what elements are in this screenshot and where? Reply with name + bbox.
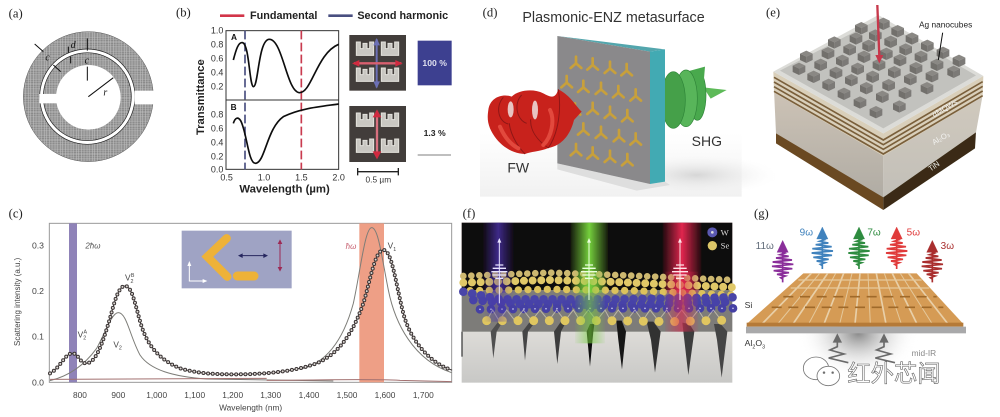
dark background — [462, 223, 732, 293]
x axis ticks: 800 — [73, 390, 87, 400]
panel a: ring resonator diagram — [9, 6, 155, 162]
substrate floor — [462, 330, 732, 383]
x axis title: Wavelength (µm) — [239, 184, 330, 196]
harmonic 5 omega — [886, 227, 920, 269]
x axis ticks: 1,000 — [146, 390, 167, 400]
gold nanoantennas — [561, 57, 641, 165]
plate contact shadow — [557, 163, 670, 191]
watermark text: 红外芯闻 — [847, 360, 941, 386]
Al2O3 layer — [774, 90, 983, 197]
Se top atoms — [463, 273, 733, 295]
emitted beams — [482, 223, 701, 293]
purple wave packet — [491, 238, 507, 303]
band labels — [84, 241, 356, 251]
y axis ticks: 0.8 — [211, 109, 223, 119]
chart frame — [49, 223, 452, 382]
legend: Second harmonic — [357, 10, 448, 22]
Se bottom atoms — [487, 320, 733, 322]
legend: Fundamental — [250, 10, 317, 22]
peak labels: V — [78, 329, 83, 339]
x axis ticks: 1.0 — [258, 173, 270, 183]
harmonic 3 omega — [922, 240, 954, 282]
y axis ticks: 0.4 — [211, 137, 223, 147]
watermark icon — [803, 357, 840, 386]
Ag nanocubes callout — [919, 19, 972, 60]
2 omega band — [69, 223, 77, 382]
plot divider — [226, 98, 339, 101]
100 percent box: 100 % — [422, 58, 447, 68]
x axis ticks: 900 — [111, 390, 126, 400]
y axis ticks: 0.3 — [32, 241, 44, 251]
white gap ring — [40, 49, 135, 144]
Ag nanocubes callout: Ag nanocubes — [919, 19, 972, 29]
y axis ticks — [211, 25, 223, 175]
green SHG helix — [661, 67, 727, 128]
AFM tips — [462, 321, 727, 378]
y axis ticks: 1.0 — [211, 25, 223, 35]
second harmonic marker — [242, 31, 247, 169]
scale bar — [358, 168, 398, 185]
plot frame — [226, 31, 339, 169]
metasurface plate — [557, 36, 665, 184]
y axis ticks: 0.2 — [211, 81, 223, 91]
x axis ticks: 1,700 — [413, 390, 434, 400]
x axis ticks — [73, 390, 434, 400]
y axis ticks: 0.6 — [211, 123, 223, 133]
band labels: 2ħω — [84, 241, 100, 250]
Al2O3 label: 3 — [762, 344, 765, 350]
inner ring slit — [39, 94, 59, 103]
panel f label: (f) — [463, 206, 475, 220]
x axis ticks: 1,500 — [337, 390, 358, 400]
Al2O3 label: O — [755, 338, 762, 348]
top surface — [773, 15, 983, 133]
peak labels: A — [84, 330, 88, 336]
1.3 percent value: 1.3 % — [424, 128, 446, 138]
measured curve dots — [50, 250, 452, 374]
atom legend — [707, 227, 730, 251]
panel g: high harmonic generation — [745, 206, 966, 386]
band labels: ħω — [346, 242, 356, 251]
panel f: WSe2 on tips — [462, 206, 733, 383]
harmonic 3 omega: 3ω — [941, 241, 954, 252]
y axis ticks: 0.2 — [32, 286, 44, 296]
peak labels — [78, 241, 396, 352]
dimension letters: r — [103, 87, 107, 98]
harmonic 9 omega — [800, 227, 833, 269]
peak labels: 2 — [83, 336, 86, 342]
SEM image bottom — [349, 106, 406, 162]
Si label: Si — [745, 300, 752, 310]
y axis ticks: 0.8 — [211, 39, 223, 49]
floor shadow — [617, 155, 777, 195]
curve tags: A — [231, 32, 237, 42]
x axis title: Wavelength (nm) — [219, 403, 282, 413]
Al2O3 label: 2 — [752, 344, 755, 350]
y axis ticks: 0.2 — [211, 151, 223, 161]
peak labels: 2 — [119, 346, 122, 352]
mid-IR label: mid-IR — [912, 348, 936, 358]
green wave packet — [581, 238, 597, 300]
y axis ticks: 0.0 — [32, 377, 44, 387]
x axis ticks: 2.0 — [332, 173, 345, 183]
substrate edge — [462, 290, 732, 332]
y axis ticks: 0.1 — [32, 332, 44, 342]
dimension letters: c — [85, 55, 90, 66]
panel d label: (d) — [483, 6, 497, 20]
x axis ticks: 1,200 — [222, 390, 243, 400]
layer labels: Al₂O₃ — [930, 130, 951, 147]
peak labels: V — [125, 273, 131, 283]
outer ring slit — [135, 91, 155, 104]
x axis ticks: 0.5 — [220, 173, 233, 183]
y axis ticks — [32, 241, 44, 387]
y axis ticks: 0.0 — [211, 165, 223, 175]
pump arrows — [829, 333, 895, 363]
peak labels: 1 — [393, 247, 396, 253]
SHG label: SHG — [692, 133, 722, 149]
x axis ticks — [220, 173, 345, 183]
x axis ticks: 1,600 — [375, 390, 396, 400]
y axis ticks: 0.4 — [211, 67, 223, 77]
y axis ticks: 0.6 — [211, 53, 223, 63]
peak labels: 2 — [131, 279, 134, 285]
layer labels: αMQWs — [930, 97, 959, 119]
peak labels: B — [131, 273, 135, 279]
panel c label: (c) — [9, 206, 23, 220]
sapphire substrate — [746, 327, 966, 333]
harmonic 11 omega: 11ω — [756, 241, 774, 252]
x axis ticks: 1,300 — [260, 390, 281, 400]
W atoms — [463, 292, 733, 309]
Al2O3 label: Al — [745, 338, 752, 348]
layer labels — [927, 97, 959, 173]
FW label: FW — [507, 160, 530, 176]
panel c: scattering spectrum — [9, 206, 452, 413]
SEM image top — [349, 35, 406, 91]
red FW helix — [488, 89, 582, 154]
atom legend: W — [721, 228, 730, 238]
x axis ticks: 1,400 — [299, 390, 320, 400]
panel e: nanocube device stack — [766, 5, 983, 210]
beam tint over lattice — [483, 272, 698, 343]
dimension letters — [45, 40, 107, 98]
panel a label: (a) — [9, 6, 23, 20]
outer hatched ring — [23, 32, 153, 162]
MQW stripes — [773, 72, 983, 156]
TiN layer — [776, 132, 976, 210]
atom legend: Se — [721, 241, 729, 251]
panel d title: Plasmonic-ENZ metasurface — [522, 10, 705, 26]
incident red beam — [875, 5, 883, 63]
y axis title: Transmittance — [195, 59, 207, 135]
y axis title: Scattering intensity (a.u.) — [13, 257, 22, 346]
harmonic 7 omega — [848, 227, 881, 269]
curve A — [233, 39, 339, 93]
legend — [220, 10, 448, 22]
fundamental marker — [299, 31, 304, 169]
x axis ticks: 1.5 — [295, 173, 308, 183]
x axis ticks: 1,100 — [184, 390, 205, 400]
panel b label: (b) — [176, 6, 191, 20]
100 percent box — [418, 41, 452, 85]
red wave packet — [672, 238, 688, 300]
harmonic 7 omega: 7ω — [867, 228, 881, 239]
Ag nanocubes — [793, 18, 965, 118]
silicon array — [747, 273, 963, 327]
harmonic 11 omega — [756, 240, 793, 282]
centre opening — [56, 65, 121, 130]
scale bar: 0.5 µm — [366, 175, 391, 185]
harmonic 5 omega: 5ω — [907, 228, 920, 239]
peak labels: V — [388, 241, 393, 251]
mid-IR glow — [798, 288, 918, 378]
curve tags — [231, 32, 237, 112]
dimension letters: c — [45, 53, 50, 64]
floor backdrop — [480, 133, 742, 197]
panel b: transmittance plots — [176, 6, 452, 196]
dimension lines — [35, 38, 113, 97]
bonds — [487, 310, 722, 321]
baseline traces — [50, 378, 452, 382]
panel g label: (g) — [754, 206, 769, 220]
panel d: plasmonic ENZ metasurface — [480, 6, 777, 197]
layer labels: TiN — [927, 159, 941, 173]
panel e label: (e) — [766, 6, 780, 20]
curve B — [233, 104, 339, 163]
inner hatched ring — [43, 53, 131, 141]
peak labels: V — [113, 339, 119, 349]
thin fit V1 — [300, 228, 452, 373]
thin fit V2 — [50, 313, 333, 381]
inset schematic — [182, 231, 292, 288]
curve tags: B — [231, 102, 237, 112]
omega band — [359, 223, 384, 382]
1.3 percent value — [418, 128, 451, 155]
harmonic 9 omega: 9ω — [800, 228, 813, 239]
dimension letters: d — [71, 40, 77, 51]
